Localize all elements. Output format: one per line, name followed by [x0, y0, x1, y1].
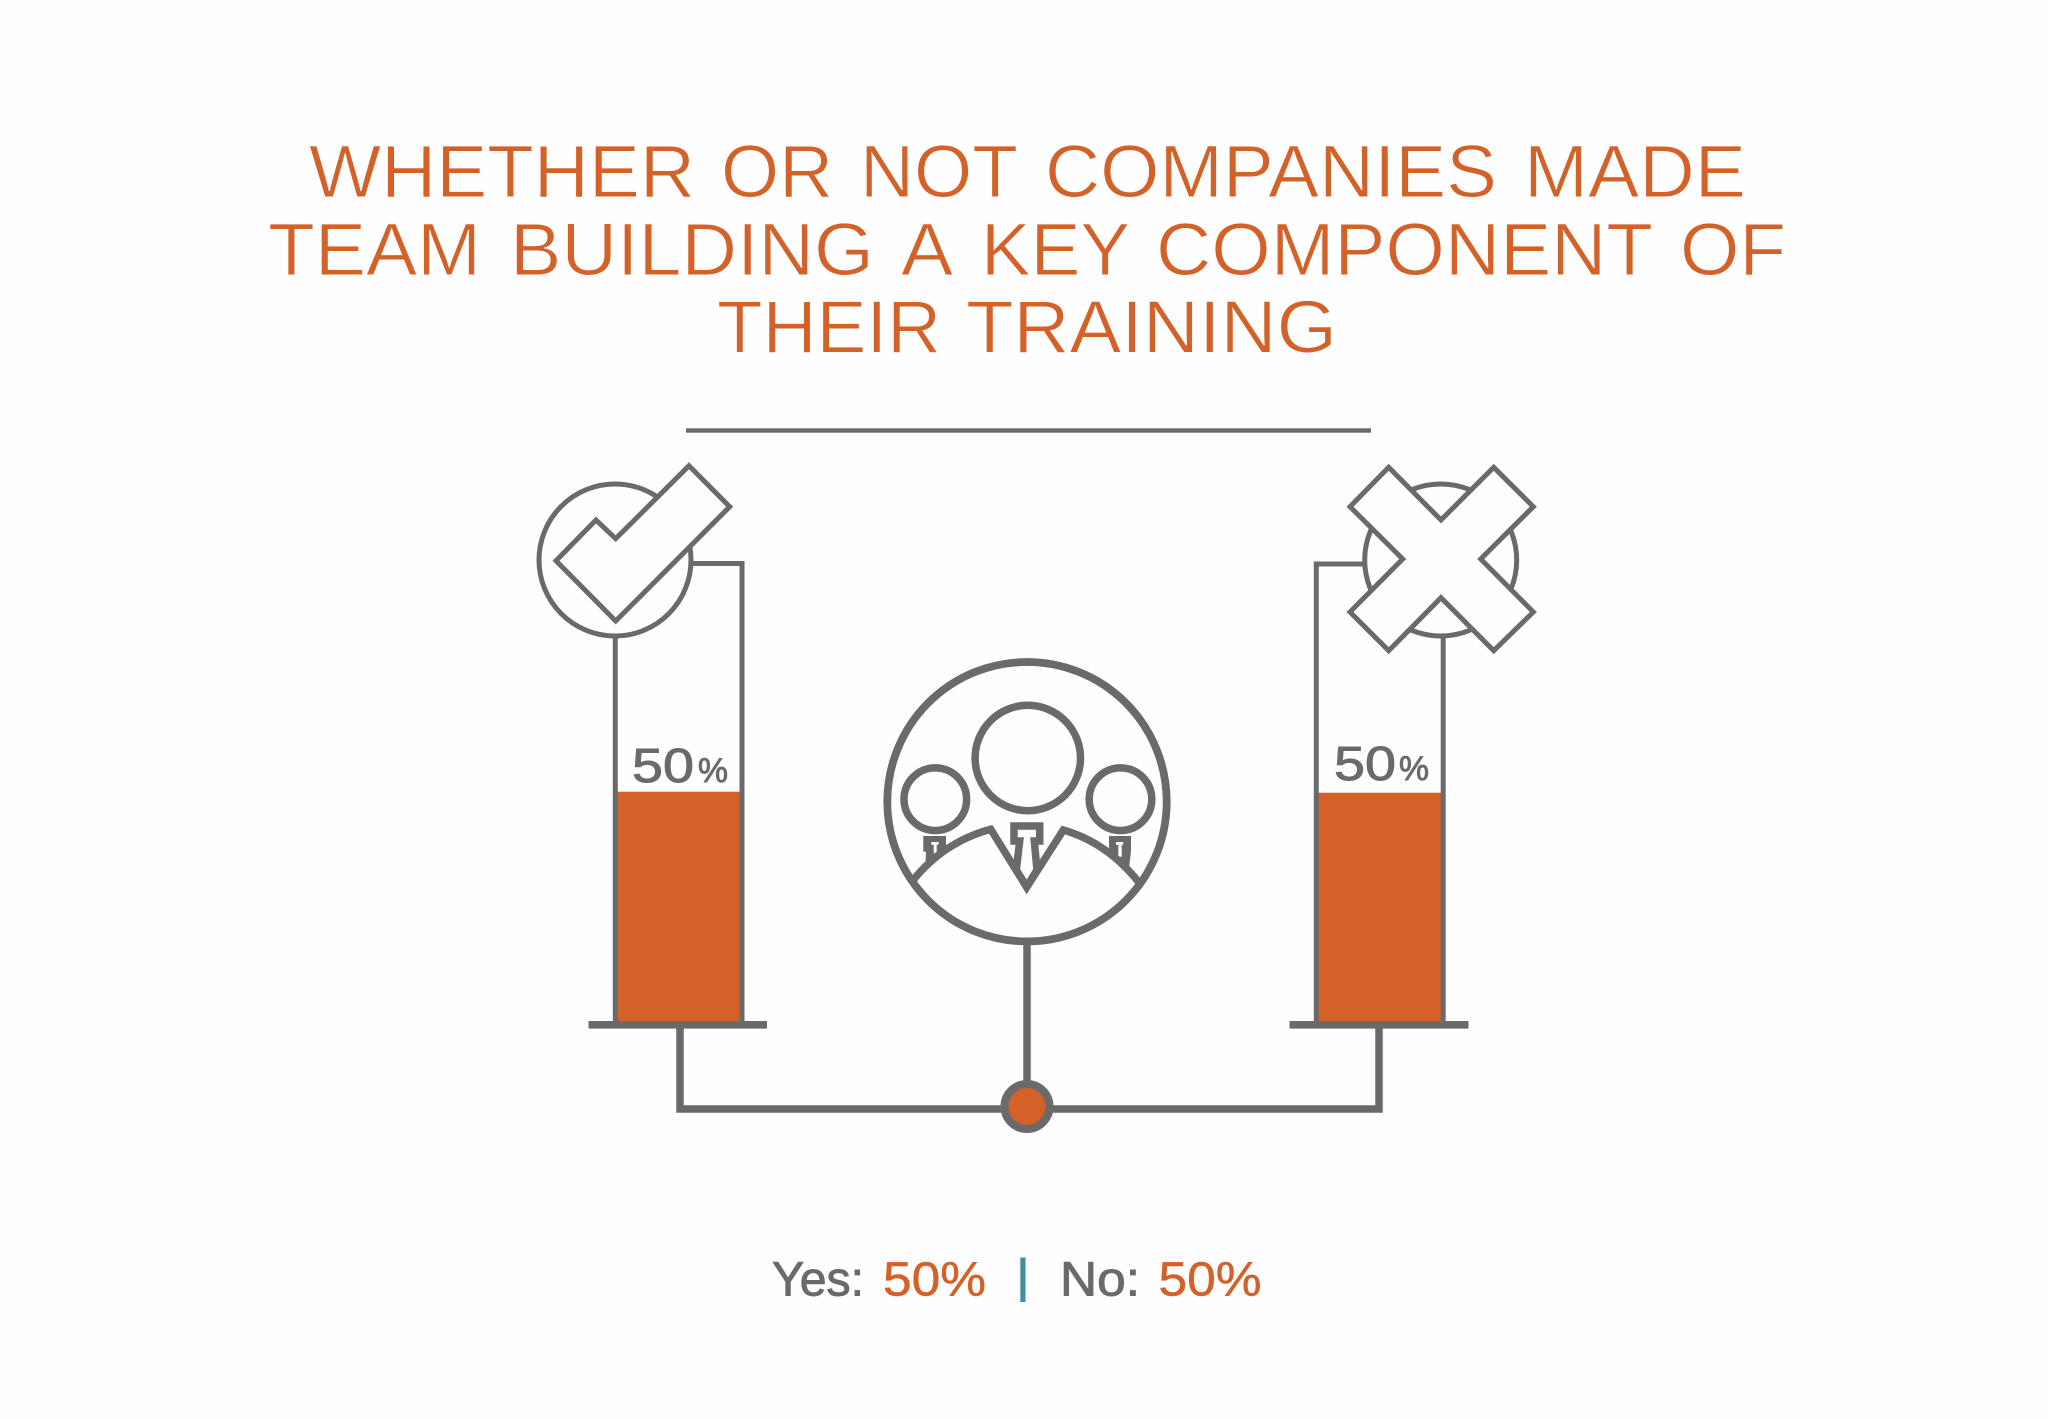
yes bar fill	[617, 792, 740, 1022]
title rule	[686, 428, 1371, 433]
icon: check circle	[539, 484, 691, 636]
no bar fill	[1318, 793, 1441, 1022]
left person tie	[923, 836, 946, 866]
yes bar value: %	[698, 752, 728, 790]
title: COMPANIES	[1045, 130, 1497, 213]
left head	[904, 768, 967, 830]
no bar base	[1290, 1021, 1468, 1029]
yes bar base	[588, 1021, 767, 1029]
title: BUILDING	[510, 208, 874, 291]
legend yes	[772, 1252, 986, 1306]
centre head	[975, 705, 1080, 811]
legend yes: 50%	[883, 1252, 986, 1306]
panel: yes bar	[539, 466, 767, 1029]
yes bar value: 50	[632, 740, 694, 793]
legend divider	[1020, 1258, 1026, 1302]
icon: team of people	[887, 662, 1167, 941]
legend	[772, 1252, 1262, 1306]
title: OR	[721, 130, 833, 213]
body and collar	[913, 829, 1139, 887]
connector node	[1004, 1084, 1050, 1129]
no bar value: %	[1399, 750, 1429, 788]
title: OF	[1680, 208, 1786, 291]
no bar value: 50	[1334, 738, 1396, 791]
yes bar value	[632, 740, 728, 793]
yes bar outline	[615, 564, 742, 1022]
title: NOT	[860, 130, 1018, 213]
title: THEIR	[717, 285, 941, 368]
title: KEY	[981, 208, 1130, 291]
icon: cross circle	[1365, 484, 1517, 636]
title: MADE	[1524, 130, 1746, 213]
panel: no bar	[1290, 467, 1533, 1029]
title: TRAINING	[966, 285, 1337, 368]
title: COMPONENT	[1156, 208, 1653, 291]
outer circle	[887, 662, 1167, 941]
title	[268, 130, 1786, 368]
legend no	[1060, 1252, 1262, 1306]
no bar value	[1334, 738, 1429, 791]
icon: cross mark	[1350, 467, 1533, 651]
title: A	[901, 208, 953, 291]
centre tie	[1014, 826, 1040, 887]
legend no: 50%	[1158, 1252, 1262, 1306]
icon: check mark	[556, 466, 730, 621]
title: WHETHER	[309, 130, 695, 213]
no bar outline	[1316, 564, 1443, 1022]
legend no: No:	[1060, 1252, 1140, 1306]
right head	[1089, 768, 1152, 830]
right person tie	[1109, 836, 1131, 868]
connector lines	[680, 940, 1379, 1109]
legend yes: Yes:	[772, 1252, 864, 1306]
title: TEAM	[268, 208, 481, 291]
